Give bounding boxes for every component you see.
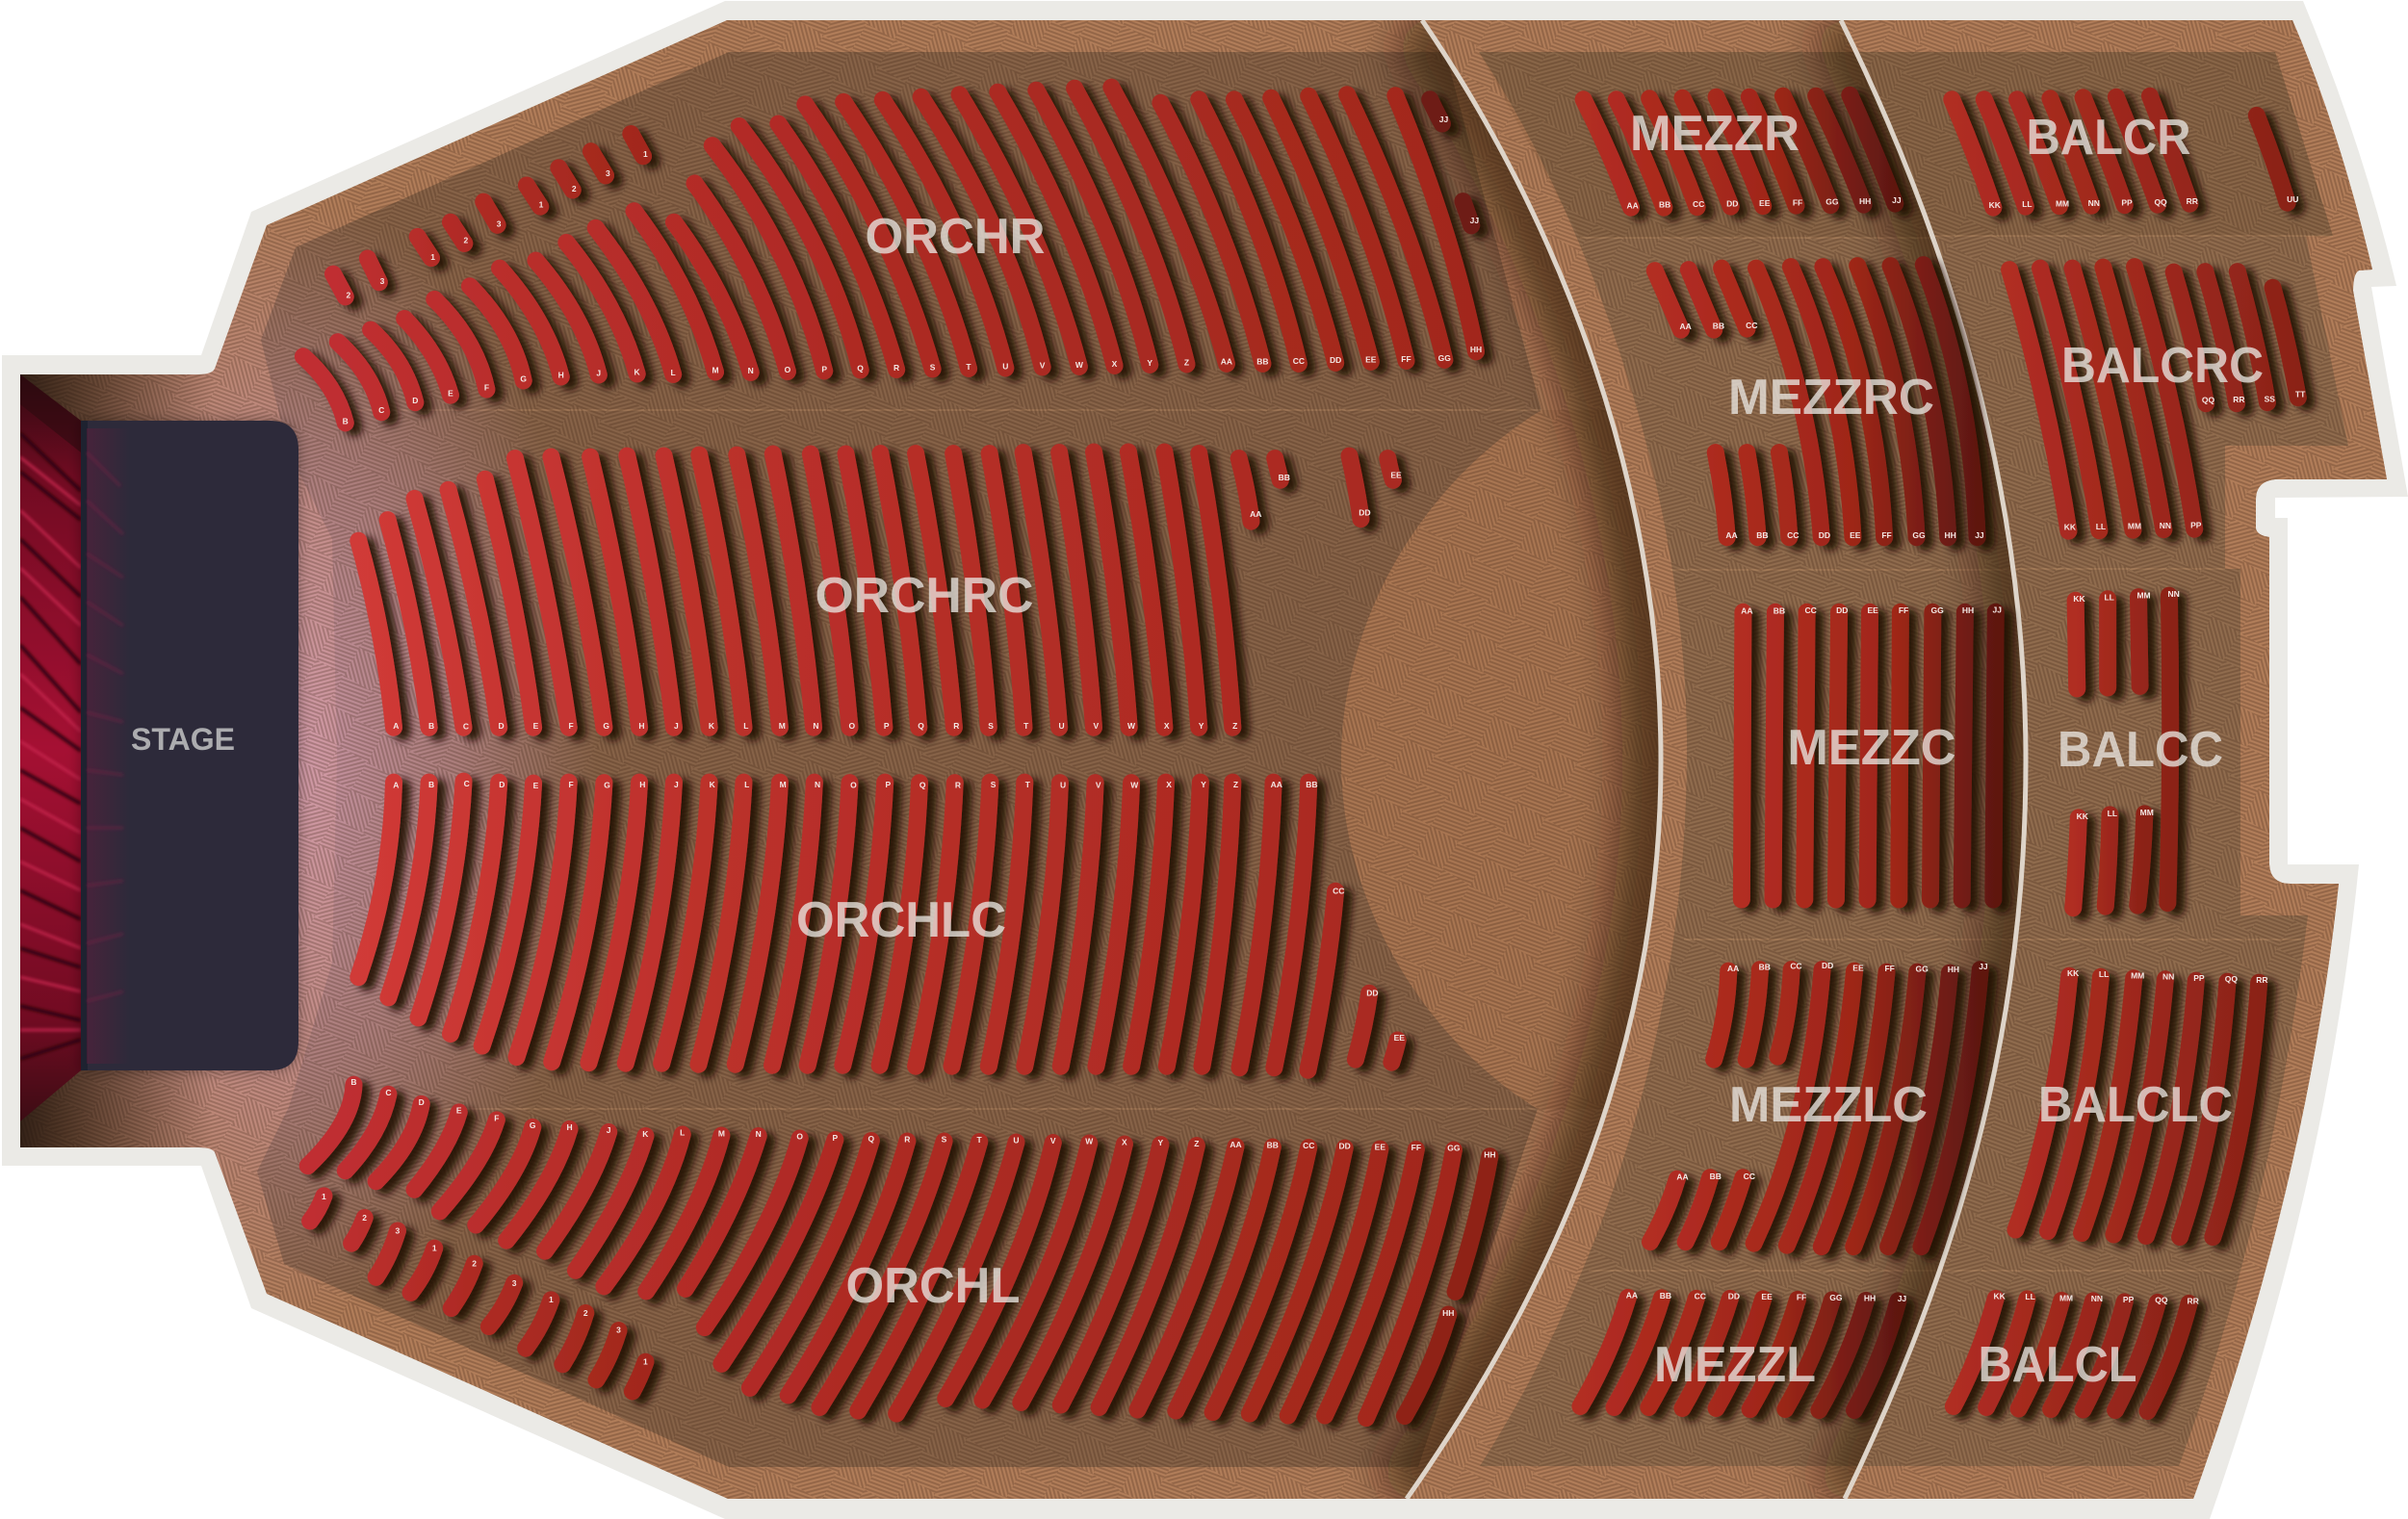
section: ORCHL: CC — [1303, 1141, 1314, 1150]
section: ORCHLC: L — [744, 780, 749, 789]
section: ORCHL: 3 — [396, 1226, 401, 1236]
section: ORCHL: 2 — [472, 1259, 477, 1269]
section: ORCHRC: Q — [918, 721, 924, 731]
section: ORCHR: U — [1002, 361, 1008, 371]
section: ORCHL: HH — [1484, 1150, 1495, 1160]
section: ORCHR: 1 — [539, 200, 544, 210]
section: ORCHRC: J — [674, 721, 679, 731]
section: MEZZLC: BB — [1759, 963, 1771, 972]
section: MEZZLC — [1650, 961, 1988, 1247]
section: ORCHL: S — [942, 1135, 947, 1145]
section: BALCLC — [2015, 968, 2267, 1237]
section: MEZZLC: GG — [1916, 965, 1929, 974]
section: ORCHLC: U — [1060, 781, 1066, 790]
section: BALCC: KK — [2073, 594, 2086, 604]
section: MEZZRC: JJ — [1975, 530, 1984, 540]
section: BALCC: MM — [2137, 591, 2151, 601]
shadow around stage — [20, 374, 213, 423]
section: ORCHR: Z — [1184, 357, 1189, 367]
section: MEZZC: HH — [1962, 605, 1974, 615]
section labels: BALCC — [2058, 722, 2223, 778]
section: ORCHR: G — [520, 373, 527, 383]
section: ORCHR: E — [448, 389, 453, 399]
section labels: ORCHRC — [815, 568, 1034, 624]
section: ORCHLC: S — [991, 780, 997, 789]
section: ORCHLC: EE — [1394, 1033, 1405, 1043]
section: ORCHLC: DD — [1366, 989, 1379, 998]
section: BALCC — [2073, 589, 2180, 908]
section: ORCHL: K — [642, 1129, 649, 1139]
section: BALCR: KK — [1989, 200, 2002, 210]
section: ORCHR: H — [558, 370, 564, 379]
section: ORCHR: P — [821, 364, 827, 373]
section: ORCHRC: A — [393, 721, 399, 731]
section: ORCHR: O — [785, 365, 791, 374]
section: MEZZC — [1741, 605, 2002, 900]
section: ORCHL: HH — [1442, 1308, 1454, 1318]
section: ORCHLC — [358, 779, 1405, 1070]
section: BALCLC: RR — [2256, 975, 2267, 985]
section: ORCHL: BB — [1267, 1141, 1279, 1150]
section: MEZZRC: EE — [1850, 530, 1861, 540]
section: BALCL: NN — [2091, 1294, 2103, 1303]
section: ORCHL: 1 — [322, 1192, 326, 1201]
section: ORCHLC: E — [533, 781, 539, 790]
section: ORCHLC: H — [639, 780, 645, 789]
section: MEZZC: DD — [1836, 605, 1848, 615]
section: ORCHL: F — [494, 1113, 499, 1122]
section: BALCRC: QQ — [2202, 396, 2214, 405]
section: BALCL — [1954, 1291, 2199, 1411]
section: BALCL: MM — [2059, 1293, 2073, 1302]
section: ORCHRC: B — [428, 721, 434, 731]
section: BALCL: PP — [2123, 1295, 2135, 1304]
section: ORCHL: EE — [1375, 1143, 1385, 1152]
section: ORCHL: GG — [1447, 1144, 1461, 1153]
section: ORCHLC: J — [674, 780, 679, 789]
section: ORCHL: L — [680, 1128, 685, 1137]
section: MEZZC: GG — [1930, 605, 1944, 615]
section: MEZZRC: CC — [1746, 321, 1757, 330]
section: ORCHLC: R — [955, 781, 961, 790]
section: BALCLC: LL — [2099, 969, 2109, 979]
section: BALCRC: NN — [2160, 521, 2171, 530]
section labels: BALCRC — [2061, 338, 2264, 394]
section: ORCHLC: X — [1166, 780, 1172, 789]
section: ORCHR: 1 — [643, 149, 648, 159]
section: MEZZL: BB — [1660, 1291, 1671, 1300]
section: BALCLC: PP — [2193, 973, 2205, 983]
section: BALCLC: KK — [2067, 968, 2080, 978]
section: ORCHR: BB — [1256, 356, 1269, 366]
panel: mezzanine floor — [1410, 20, 1687, 1499]
section: ORCHR: 2 — [572, 184, 577, 193]
section: ORCHL: B — [350, 1077, 357, 1087]
section: ORCHLC: Q — [919, 781, 926, 790]
section: ORCHR: JJ — [1470, 216, 1479, 225]
section: BALCR: PP — [2121, 198, 2133, 208]
section: MEZZR: CC — [1693, 199, 1704, 209]
section: MEZZL: CC — [1695, 1291, 1706, 1300]
section: ORCHLC: P — [885, 780, 892, 789]
section: ORCHLC: K — [710, 780, 716, 789]
section: ORCHLC: G — [604, 781, 610, 790]
section: ORCHR: K — [634, 367, 641, 376]
section: BALCR — [1952, 96, 2298, 210]
section: ORCHRC: F — [569, 721, 574, 731]
section: ORCHRC: K — [709, 721, 715, 731]
section labels: MEZZL — [1654, 1337, 1816, 1393]
section labels: ORCHL — [845, 1258, 1021, 1314]
section: ORCHR: L — [671, 368, 676, 377]
section: BALCRC: TT — [2295, 390, 2306, 399]
section: MEZZL: JJ — [1898, 1294, 1906, 1303]
section: MEZZR: AA — [1627, 201, 1639, 211]
section: MEZZR: BB — [1659, 200, 1670, 210]
section: BALCRC: KK — [2064, 523, 2077, 532]
section: ORCHR: 1 — [430, 252, 435, 262]
section: ORCHL: X — [1122, 1138, 1127, 1147]
section: ORCHLC: AA — [1271, 780, 1282, 789]
section: ORCHRC: Z — [1232, 721, 1237, 731]
section: BALCRC — [2009, 267, 2306, 532]
section: ORCHRC: L — [743, 721, 748, 731]
section: MEZZC: EE — [1867, 605, 1878, 615]
section labels: MEZZRC — [1728, 370, 1934, 425]
section: ORCHL: N — [756, 1129, 762, 1139]
section labels — [796, 106, 2264, 1393]
section: BALCRC: RR — [2233, 395, 2245, 404]
section: ORCHRC — [358, 452, 1402, 732]
section: ORCHRC: M — [779, 721, 786, 731]
section: ORCHR: 3 — [606, 168, 610, 178]
section: MEZZRC: AA — [1680, 322, 1692, 331]
section: MEZZR: JJ — [1892, 195, 1902, 205]
section: ORCHRC: O — [849, 721, 856, 731]
section: BALCLC: QQ — [2225, 974, 2238, 984]
section: ORCHL: 2 — [583, 1308, 588, 1318]
section labels: ORCHLC — [796, 892, 1006, 948]
section: ORCHLC: N — [815, 780, 820, 789]
section: ORCHL: T — [977, 1135, 983, 1145]
section: ORCHR: T — [966, 362, 971, 372]
section: ORCHRC: W — [1127, 721, 1135, 731]
section: MEZZC: AA — [1741, 605, 1753, 615]
section: MEZZRC: FF — [1881, 530, 1892, 540]
section: ORCHL: C — [385, 1088, 391, 1097]
section: MEZZRC: CC — [1787, 530, 1799, 540]
section: MEZZRC: AA — [1725, 530, 1738, 540]
curtain — [20, 374, 81, 1121]
section: ORCHL: Q — [867, 1134, 874, 1144]
section: ORCHL: H — [566, 1122, 573, 1132]
section: ORCHRC: BB — [1279, 473, 1290, 482]
section: ORCHL: 1 — [643, 1357, 648, 1367]
section: ORCHR: S — [930, 362, 936, 372]
section: ORCHRC: S — [988, 721, 994, 731]
section: ORCHR: GG — [1438, 353, 1451, 363]
section: ORCHR: HH — [1470, 345, 1482, 354]
section: ORCHLC: O — [850, 781, 857, 790]
section: MEZZLC: AA — [1676, 1172, 1689, 1182]
section: ORCHR: V — [1040, 360, 1046, 370]
section: ORCHR: JJ — [1439, 115, 1449, 124]
section: ORCHR: AA — [1221, 356, 1232, 366]
section: MEZZRC: HH — [1945, 530, 1956, 540]
section: ORCHR: W — [1075, 360, 1083, 370]
section: ORCHR: X — [1112, 359, 1118, 369]
panel: stage — [81, 421, 298, 1070]
section: ORCHR: Q — [857, 363, 864, 373]
section: ORCHLC: Z — [1233, 780, 1238, 789]
section: BALCC: LL — [2108, 809, 2117, 818]
section: ORCHL: AA — [1230, 1140, 1242, 1149]
section: BALCC: NN — [2168, 589, 2180, 599]
section labels: ORCHR — [865, 209, 1046, 265]
section: ORCHR — [303, 88, 1482, 425]
section: ORCHL: 1 — [432, 1244, 437, 1253]
section: MEZZLC: DD — [1822, 961, 1833, 970]
section: MEZZRC: BB — [1756, 530, 1768, 540]
panel: orchestra floor — [257, 52, 1637, 1467]
section: MEZZR: GG — [1825, 197, 1839, 207]
section: ORCHL: D — [419, 1097, 425, 1107]
section: ORCHRC: V — [1094, 721, 1100, 731]
section: ORCHLC: B — [428, 780, 434, 789]
section: ORCHL: FF — [1411, 1143, 1421, 1152]
section: MEZZLC: JJ — [1979, 962, 1988, 971]
section: ORCHR: M — [712, 365, 719, 374]
section: ORCHR: EE — [1365, 354, 1377, 364]
section: MEZZRC: GG — [1912, 530, 1926, 540]
section: ORCHL: DD — [1339, 1142, 1351, 1151]
section: ORCHRC: N — [813, 721, 818, 731]
section: ORCHL: M — [718, 1129, 725, 1138]
section: ORCHL: O — [796, 1132, 803, 1142]
section: MEZZLC: AA — [1727, 964, 1739, 973]
section: BALCR: MM — [2056, 199, 2069, 209]
section: BALCC: LL — [2105, 593, 2114, 603]
section: MEZZL: FF — [1797, 1292, 1806, 1301]
section: ORCHR: D — [412, 396, 418, 405]
section: MEZZL: EE — [1761, 1292, 1773, 1301]
section labels: MEZZC — [1787, 720, 1956, 776]
section: MEZZRC: DD — [1819, 530, 1830, 540]
section: BALCR: UU — [2287, 194, 2298, 204]
section: ORCHLC: W — [1130, 781, 1138, 790]
section: MEZZC: JJ — [1993, 605, 2002, 614]
section: MEZZR: EE — [1759, 198, 1771, 208]
section: MEZZC: BB — [1774, 605, 1785, 615]
section: MEZZL: AA — [1626, 1290, 1638, 1300]
section: ORCHL: J — [607, 1125, 611, 1135]
section: MEZZRC: BB — [1713, 322, 1724, 331]
section: BALCR: RR — [2187, 196, 2198, 206]
section: MEZZR: FF — [1793, 198, 1802, 208]
heading: stage: STAGE — [131, 722, 235, 757]
section labels: MEZZR — [1630, 106, 1800, 162]
section: ORCHL: R — [904, 1135, 910, 1145]
section: ORCHR: J — [596, 368, 601, 377]
section: ORCHR: 2 — [347, 290, 351, 299]
section: ORCHR: B — [343, 416, 349, 425]
stage glow — [100, 243, 575, 1276]
section: MEZZLC: EE — [1852, 964, 1864, 973]
section: ORCHRC: E — [533, 721, 539, 731]
section: ORCHRC: Y — [1199, 721, 1204, 731]
panel: centre aisle — [1341, 410, 1637, 1109]
section: ORCHR: FF — [1401, 354, 1411, 364]
section: ORCHR: N — [748, 366, 754, 375]
section: ORCHLC: V — [1096, 781, 1101, 790]
section: ORCHRC: X — [1164, 721, 1170, 731]
section: BALCR: NN — [2088, 198, 2100, 208]
section: ORCHR: 2 — [464, 235, 469, 245]
section: ORCHLC: M — [780, 780, 787, 789]
section: ORCHRC: AA — [1250, 509, 1261, 519]
section: BALCR: LL — [2022, 199, 2033, 209]
section: ORCHRC: C — [463, 722, 469, 732]
section: ORCHR: R — [893, 363, 899, 373]
section: ORCHRC: EE — [1390, 471, 1402, 480]
section: MEZZC: FF — [1899, 605, 1908, 615]
section: BALCC: KK — [2077, 811, 2089, 821]
section: ORCHLC: Y — [1201, 780, 1206, 789]
section: ORCHR: CC — [1293, 356, 1305, 366]
section: ORCHL: 1 — [549, 1295, 554, 1304]
section: ORCHRC: D — [499, 721, 505, 731]
section: MEZZR — [1584, 95, 1902, 211]
section: ORCHLC: D — [499, 780, 505, 789]
section labels: MEZZLC — [1729, 1077, 1928, 1133]
section: MEZZRC — [1655, 265, 1984, 540]
section: BALCL: QQ — [2155, 1295, 2168, 1304]
section: MEZZL — [1580, 1290, 1906, 1410]
section: ORCHL: V — [1050, 1136, 1056, 1146]
section: MEZZLC: CC — [1790, 962, 1802, 971]
section: MEZZC: CC — [1804, 605, 1817, 615]
section: ORCHLC: A — [393, 781, 399, 790]
section labels: BALCLC — [2038, 1077, 2233, 1133]
panel: balcony floor — [1841, 20, 2408, 1499]
section: MEZZR: DD — [1726, 199, 1738, 209]
section: ORCHL: U — [1013, 1136, 1020, 1146]
section: MEZZL: HH — [1864, 1293, 1876, 1302]
divider: mezzanine / balcony — [1841, 20, 2026, 1499]
section: ORCHLC: CC — [1333, 887, 1344, 896]
section: ORCHRC: P — [884, 721, 890, 731]
section labels: BALCR — [2026, 110, 2191, 166]
section: BALCR: QQ — [2154, 197, 2167, 207]
section: ORCHL: 2 — [362, 1213, 367, 1223]
section: ORCHLC: F — [569, 780, 574, 789]
section: ORCHLC: T — [1025, 780, 1031, 789]
section: ORCHL: 3 — [512, 1278, 517, 1288]
section: ORCHR: DD — [1330, 355, 1341, 365]
section: MEZZLC: HH — [1948, 965, 1959, 974]
section: ORCHR: 3 — [380, 276, 385, 286]
section: ORCHRC: T — [1023, 721, 1029, 731]
section: MEZZR: HH — [1859, 196, 1871, 206]
section: ORCHL: W — [1085, 1137, 1093, 1146]
section: BALCL: KK — [1993, 1291, 2007, 1300]
section: ORCHLC: BB — [1306, 780, 1318, 789]
section: BALCL: RR — [2187, 1296, 2199, 1305]
section: ORCHL: 3 — [616, 1326, 621, 1335]
section: ORCHR: C — [378, 405, 384, 415]
section: ORCHL: G — [530, 1120, 536, 1130]
section: BALCRC: PP — [2190, 521, 2202, 530]
section: BALCRC: SS — [2265, 395, 2275, 404]
section: ORCHRC: U — [1058, 721, 1065, 731]
section: BALCRC: LL — [2096, 522, 2106, 531]
section: ORCHRC: H — [638, 721, 645, 731]
section: BALCLC: MM — [2131, 971, 2144, 981]
section: ORCHL: Y — [1158, 1138, 1164, 1147]
section: ORCHR: Y — [1147, 358, 1152, 368]
section: ORCHR: 3 — [497, 219, 502, 228]
section: BALCLC: NN — [2162, 972, 2174, 982]
section: BALCL: LL — [2025, 1292, 2035, 1301]
section: MEZZLC: FF — [1885, 964, 1895, 973]
section: BALCC: MM — [2140, 808, 2154, 817]
section: ORCHL — [308, 1077, 1495, 1418]
section: ORCHL: E — [456, 1105, 462, 1115]
section: MEZZLC: BB — [1710, 1171, 1722, 1181]
section: ORCHLC: C — [464, 779, 470, 788]
section: ORCHR: F — [484, 383, 489, 393]
section: MEZZLC: CC — [1744, 1171, 1755, 1181]
section: ORCHRC: R — [953, 721, 959, 731]
divider: orchestra / mezzanine — [1407, 20, 1661, 1499]
section: ORCHL: P — [832, 1133, 838, 1143]
section: MEZZL: DD — [1728, 1291, 1740, 1300]
section labels: BALCL — [1978, 1337, 2137, 1393]
section: BALCRC: MM — [2128, 522, 2141, 531]
section: ORCHRC: DD — [1359, 508, 1371, 518]
section: ORCHL: Z — [1194, 1139, 1199, 1148]
section: ORCHRC: G — [603, 721, 609, 731]
section: MEZZL: GG — [1829, 1293, 1843, 1302]
